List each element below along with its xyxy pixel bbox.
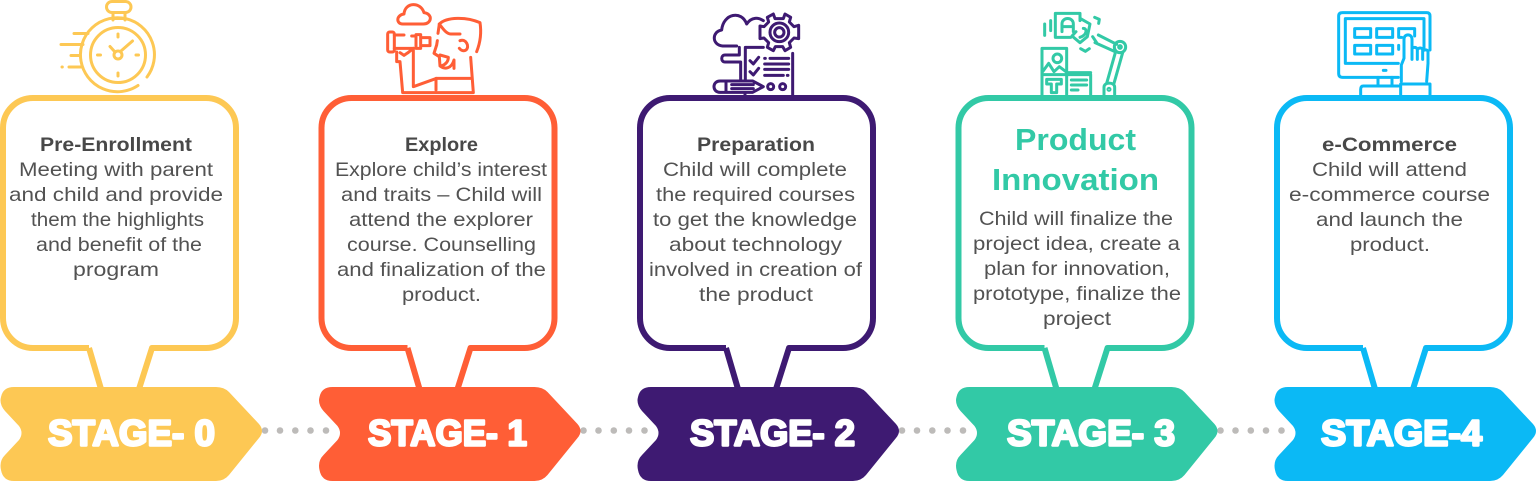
text block: stage 1: and finalization of the [337,259,546,281]
text block: stage 0 [9,134,223,281]
connector dots: stage 1 to 2 [580,427,648,434]
text block: stage 0: and benefit of the [36,234,202,256]
text block: stage 1: product. [402,284,481,306]
text block: stage 4: and launch the [1316,209,1463,231]
icon: stopwatch [61,2,154,92]
text block: stage 0: Meeting with parent [19,159,214,181]
icon: cloud gear checklist and pencil [714,14,799,95]
speech bubble: stage 2 [640,98,873,389]
panel: stage 3 product innovation [956,13,1218,481]
panel: stage 2 preparation [638,14,899,481]
banner: stage 1: STAGE- 1 [368,412,527,454]
speech bubble: stage 0 [3,98,236,389]
text block: stage 4: Child will attend [1312,159,1467,181]
icon: robotic arm and design blocks [1042,13,1126,95]
banner: stage 4 [1274,387,1536,481]
text block: stage 0: program [73,259,159,281]
text block: stage 3: Child will finalize the [979,208,1173,230]
banner: stage 3 [956,387,1218,481]
banner: stage 3: STAGE- 3 [1007,412,1175,454]
text block: stage 2: Child will complete [663,159,847,181]
text block: stage 3 [973,122,1181,330]
text block: stage 1: attend the explorer [349,209,534,231]
panel: stage 0 pre-enrollment [0,2,262,481]
connector dots: stage 2 to 3 [899,427,966,434]
text block: stage 3: project idea, create a [973,233,1180,255]
panel: stage 4 e-commerce [1274,13,1536,481]
text block: stage 2: about technology [669,234,842,256]
text block: stage 2 [649,134,863,306]
connector dots: stage 0 to 1 [262,427,329,434]
text block: stage 3: Innovation [992,162,1159,197]
text block: stage 2: the product [699,284,814,306]
banner: stage 2: STAGE- 2 [690,412,855,454]
text block: stage 1 [335,134,548,306]
speech bubble: stage 3 [958,98,1192,389]
text block: stage 3: Product [1015,122,1136,157]
text block: stage 3: plan for innovation, [984,258,1170,280]
icon: person with binoculars [388,5,481,93]
text block: stage 2: involved in creation of [649,259,863,281]
text block: stage 4: product. [1350,234,1430,256]
panel: stage 1 explore [319,5,580,481]
text block: stage 0: them the highlights [31,209,204,231]
banner: stage 0 [0,387,262,481]
text block: stage 1: and traits – Child will [341,184,542,206]
text block: stage 2: the required courses [656,184,855,206]
text block: stage 3: prototype, finalize the [973,283,1181,305]
banner: stage 0: STAGE- 0 [48,412,215,454]
text block: stage 0: and child and provide [9,184,223,206]
text block: stage 2: to get the knowledge [653,209,857,231]
text block: stage 3: project [1043,308,1112,330]
banner: stage 2 [638,387,899,481]
text block: stage 0: Pre-Enrollment [40,134,193,156]
text block: stage 4: e-Commerce [1322,134,1457,156]
icon: touch-screen monitor [1339,13,1430,95]
banner: stage 4: STAGE-4 [1321,412,1482,454]
text block: stage 4 [1289,134,1490,256]
speech bubble: stage 4 [1277,98,1510,389]
speech bubble: stage 1 [322,98,554,389]
text block: stage 4: e-commerce course [1289,184,1490,206]
text block: stage 1: Explore child’s interest [335,159,548,181]
connector dots: stage 3 to 4 [1217,427,1285,434]
text block: stage 2: Preparation [697,134,815,156]
banner: stage 1 [319,387,580,481]
text block: stage 1: course. Counselling [347,234,536,256]
text block: stage 1: Explore [405,134,478,156]
